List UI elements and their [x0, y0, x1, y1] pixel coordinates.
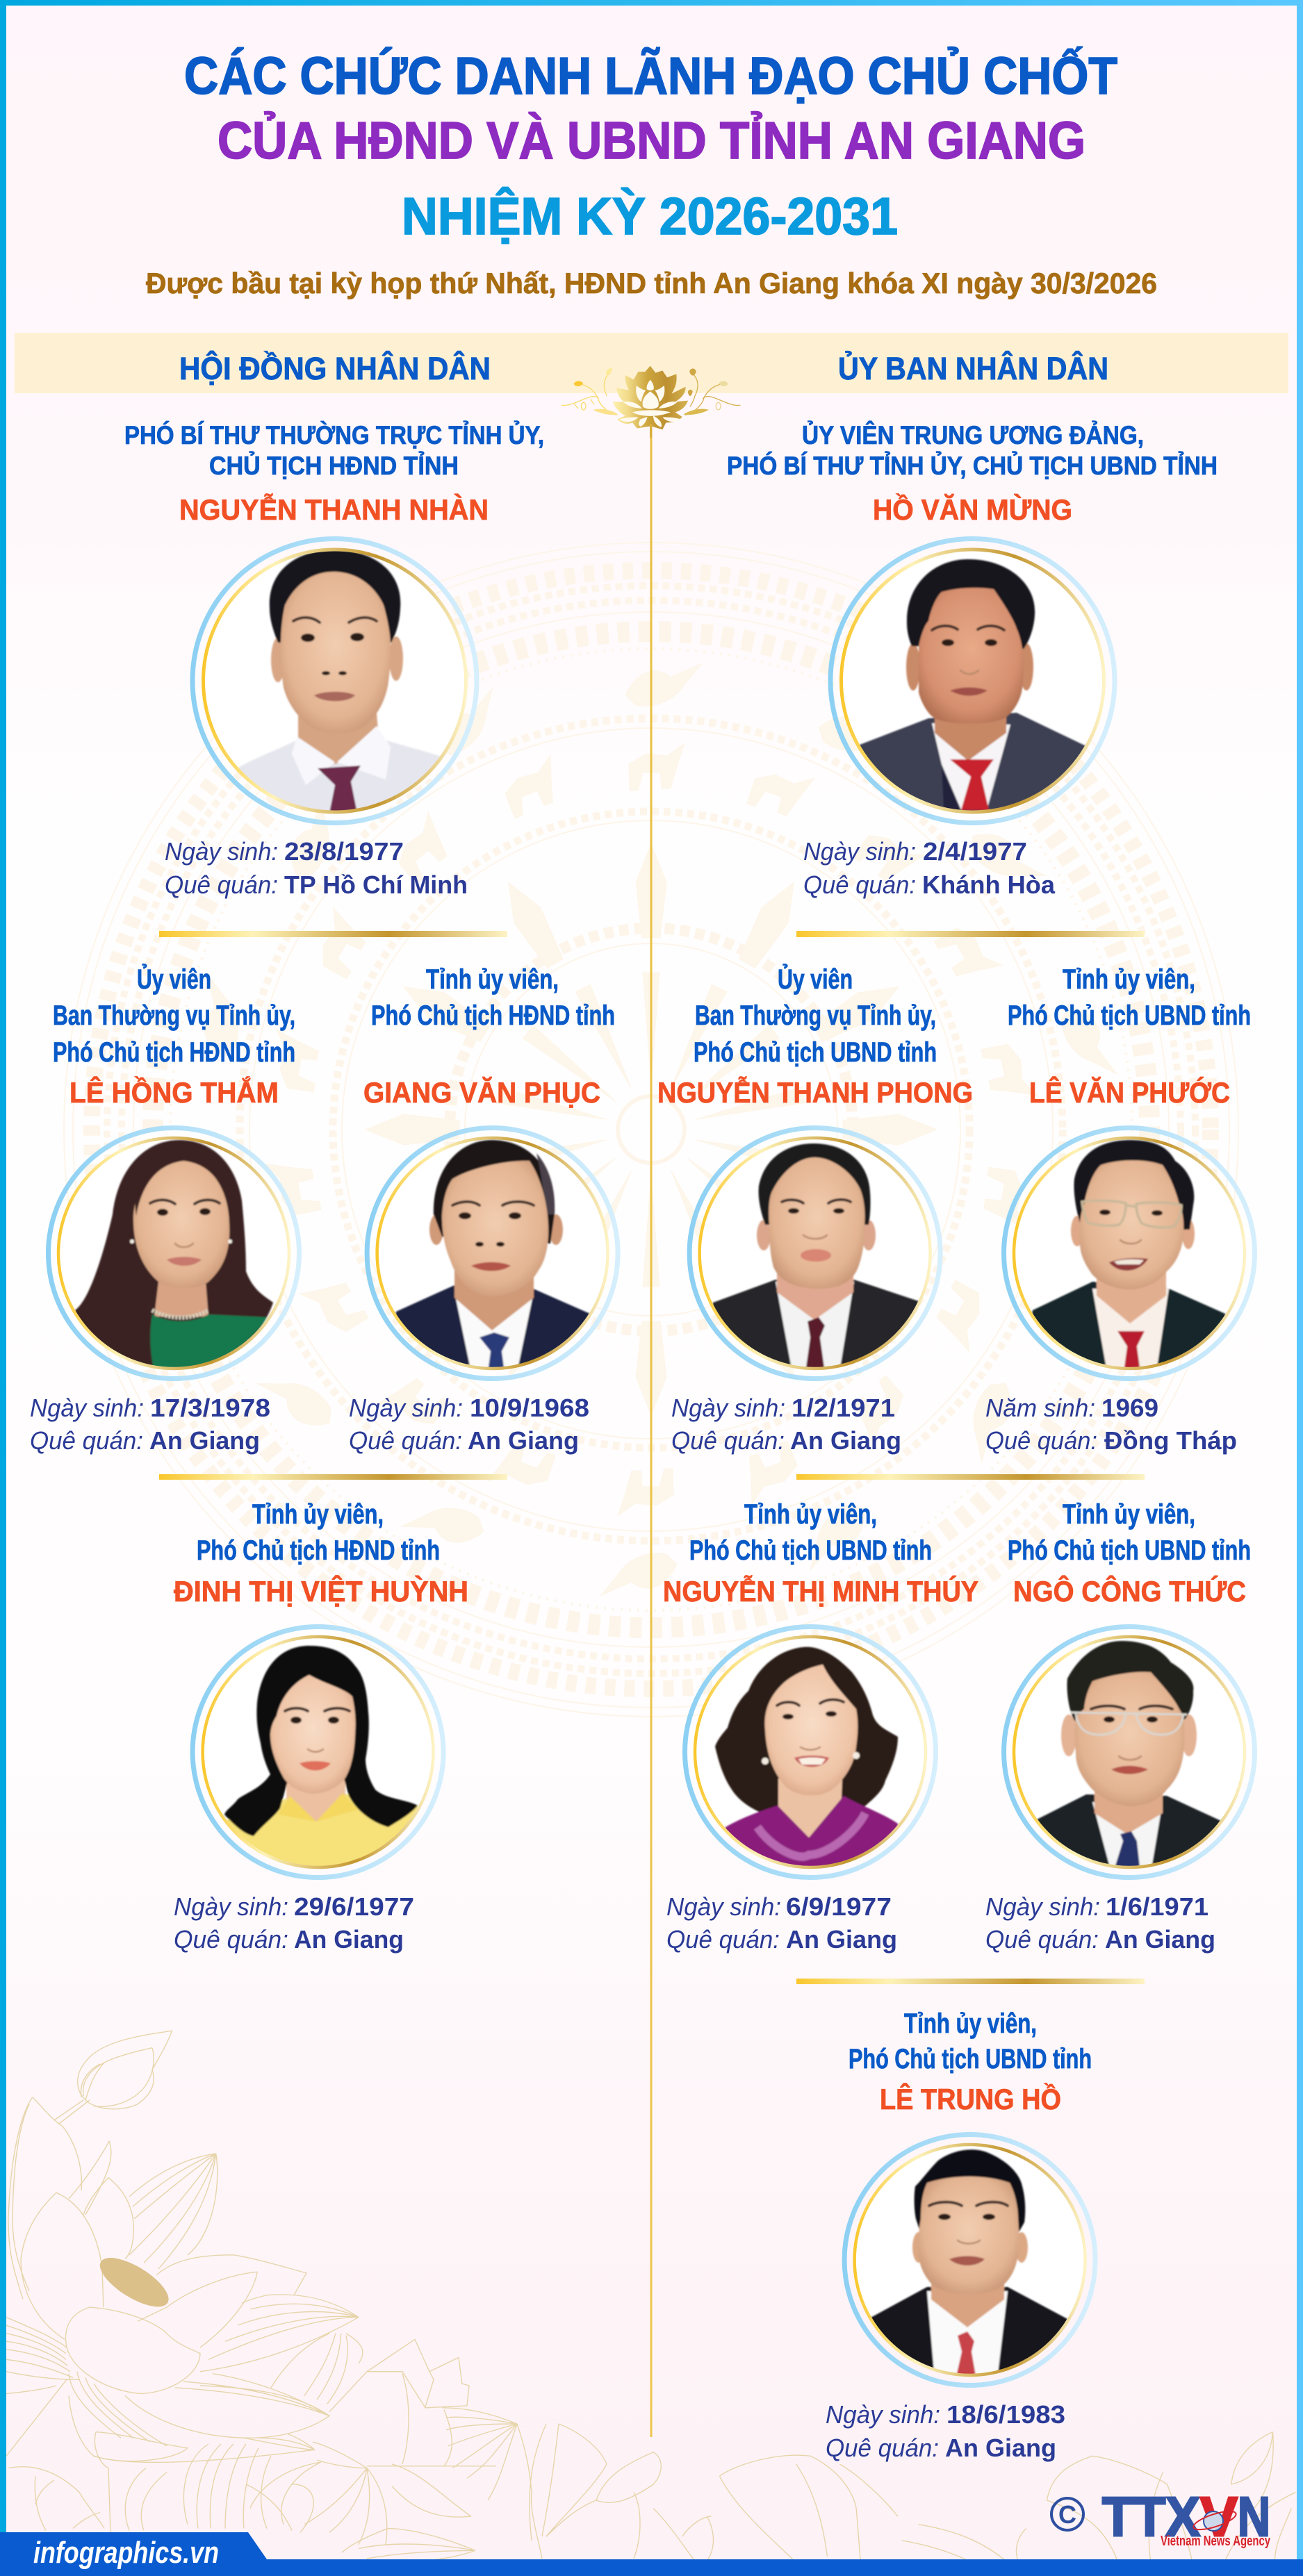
- role: Ủy viên: [778, 963, 853, 995]
- role: Phó Chủ tịch UBND tỉnh: [694, 1037, 937, 1068]
- panel: Lê Văn Phước: [985, 964, 1255, 1455]
- info: An Giang: [786, 1925, 897, 1954]
- role: Tỉnh ủy viên,: [1063, 964, 1195, 995]
- panel: Giang Văn Phục: [349, 964, 618, 1455]
- info: [666, 1892, 897, 1954]
- info: An Giang: [468, 1426, 579, 1455]
- info: 10/9/1968: [470, 1394, 589, 1422]
- role: [197, 1499, 440, 1566]
- portrait: [192, 539, 477, 823]
- background: lotus line art bottom right: [653, 2432, 1295, 2561]
- info: An Giang: [1105, 1925, 1215, 1954]
- role: PHÓ BÍ THƯ TỈNH ỦY, CHỦ TỊCH UBND TỈNH: [727, 451, 1218, 480]
- role: [53, 963, 295, 1068]
- info: [174, 1892, 414, 1954]
- name: HỒ VĂN MỪNG: [873, 493, 1072, 526]
- info: Ngày sinh:: [671, 1394, 785, 1422]
- name: LÊ HỒNG THẮM: [69, 1075, 279, 1109]
- info: 17/3/1978: [150, 1394, 270, 1422]
- panel: Nguyễn Thanh Phong: [657, 963, 973, 1455]
- info: Ngày sinh:: [165, 837, 278, 866]
- role: Ủy viên: [137, 963, 211, 995]
- role: [124, 420, 544, 480]
- title: CỦA HĐND VÀ UBND TỈNH AN GIANG: [218, 111, 1085, 170]
- role: Phó Chủ tịch HĐND tỉnh: [371, 1000, 615, 1031]
- role: Phó Chủ tịch UBND tỉnh: [849, 2044, 1092, 2074]
- role: [849, 2008, 1092, 2074]
- portrait: [1003, 1128, 1255, 1378]
- portrait: [830, 539, 1115, 823]
- info: 2/4/1977: [923, 837, 1027, 866]
- title: NHIỆM KỲ 2026-2031: [402, 187, 898, 245]
- header band: [15, 333, 1288, 393]
- name: NGUYỄN THANH PHONG: [657, 1075, 973, 1109]
- info: 18/6/1983: [946, 2400, 1065, 2429]
- role: Tỉnh ủy viên,: [1063, 1499, 1195, 1530]
- info: Quê quán:: [165, 870, 278, 899]
- info: Quê quán:: [30, 1426, 143, 1455]
- role: [689, 1499, 932, 1566]
- info: [803, 837, 1056, 899]
- info: 29/6/1977: [294, 1892, 414, 1921]
- title: [184, 47, 1117, 245]
- panel: Đinh Thị Việt Huỳnh: [174, 1499, 468, 1954]
- info: Khánh Hòa: [922, 870, 1056, 899]
- role: ỦY VIÊN TRUNG ƯƠNG ĐẢNG,: [802, 420, 1144, 449]
- name: LÊ VĂN PHƯỚC: [1029, 1075, 1230, 1109]
- info: Ngày sinh:: [349, 1394, 463, 1422]
- info: TP Hồ Chí Minh: [284, 870, 468, 899]
- info: 6/9/1977: [786, 1892, 892, 1921]
- name: NGUYỄN THỊ MINH THÚY: [663, 1574, 978, 1608]
- panel: Ngô Công Thức: [985, 1499, 1255, 1954]
- info: Quê quán:: [826, 2434, 939, 2462]
- portrait: [689, 1128, 940, 1378]
- name: NGÔ CÔNG THỨC: [1013, 1574, 1246, 1608]
- portrait: [685, 1627, 935, 1877]
- portrait: [367, 1128, 618, 1378]
- role: Tỉnh ủy viên,: [252, 1499, 384, 1530]
- name: LÊ TRUNG HỒ: [880, 2082, 1061, 2115]
- role: [727, 420, 1218, 480]
- icon: gold lotus: [562, 366, 740, 438]
- logo: TTXVN copyright: V: [1200, 2486, 1238, 2548]
- role: [1008, 964, 1251, 1031]
- panel: Lê Trung Hồ: [826, 2008, 1095, 2462]
- subtitle: Được bầu tại kỳ họp thứ Nhất, HĐND tỉnh An Giang khóa XI ngày 30/3/2026: [146, 267, 1157, 299]
- info: An Giang: [294, 1925, 404, 1954]
- info: [30, 1394, 270, 1455]
- info: Đồng Tháp: [1104, 1426, 1237, 1455]
- info: Quê quán:: [671, 1426, 785, 1455]
- role: [694, 963, 937, 1068]
- panel: Nguyễn Thanh Nhàn: [124, 420, 544, 899]
- info: Quê quán:: [174, 1925, 288, 1954]
- panel: Nguyễn Thị Minh Thúy: [663, 1499, 978, 1954]
- info: [985, 1892, 1215, 1954]
- bottom bar: [0, 2532, 1303, 2576]
- role: Ban Thường vụ Tỉnh ủy,: [695, 1000, 936, 1031]
- name: NGUYỄN THANH NHÀN: [179, 493, 489, 526]
- info: [165, 837, 468, 899]
- role: [371, 964, 615, 1031]
- info: Ngày sinh:: [30, 1394, 144, 1422]
- info: Quê quán:: [349, 1426, 462, 1455]
- info: Ngày sinh:: [803, 837, 916, 866]
- info: Ngày sinh:: [826, 2400, 940, 2429]
- role: Phó Chủ tịch UBND tỉnh: [689, 1535, 932, 1566]
- portrait: [49, 1128, 299, 1378]
- info: Quê quán:: [803, 870, 916, 899]
- role: PHÓ BÍ THƯ THƯỜNG TRỰC TỈNH ỦY,: [124, 420, 544, 449]
- center divider line: [650, 424, 652, 2437]
- info: An Giang: [945, 2434, 1056, 2462]
- source: infographics.vn: infographics.vn: [33, 2536, 219, 2570]
- info: Năm sinh:: [985, 1394, 1095, 1422]
- info: An Giang: [790, 1426, 901, 1455]
- info: An Giang: [149, 1426, 260, 1455]
- info: Quê quán:: [985, 1426, 1097, 1455]
- role: Tỉnh ủy viên,: [426, 964, 559, 995]
- info: 1/2/1971: [792, 1394, 895, 1422]
- info: 1969: [1101, 1394, 1158, 1422]
- heading: Hội đồng nhân dân: HỘI ĐỒNG NHÂN DÂN: [179, 351, 491, 386]
- info: Quê quán:: [985, 1925, 1099, 1954]
- panel: Hồ Văn Mừng: [727, 420, 1218, 899]
- info: 1/6/1971: [1106, 1892, 1208, 1921]
- portrait: [192, 1627, 443, 1877]
- info: 23/8/1977: [284, 837, 404, 866]
- logo: TTXVN copyright: N: [1238, 2486, 1270, 2548]
- role: Tỉnh ủy viên,: [904, 2008, 1037, 2039]
- title: CÁC CHỨC DANH LÃNH ĐẠO CHỦ CHỐT: [184, 47, 1117, 105]
- logo: TTXVN copyright: TTX: [1102, 2486, 1200, 2548]
- heading: Ủy ban nhân dân: ỦY BAN NHÂN DÂN: [838, 351, 1108, 386]
- role: Tỉnh ủy viên,: [744, 1499, 877, 1530]
- role: Phó Chủ tịch HĐND tỉnh: [197, 1535, 440, 1566]
- portrait: [1003, 1627, 1255, 1877]
- info: Ngày sinh:: [174, 1892, 288, 1921]
- background: lotus line art bottom left: [6, 2031, 654, 2560]
- info: Ngày sinh:: [666, 1892, 781, 1921]
- info: Ngày sinh:: [985, 1892, 1100, 1921]
- info: [671, 1394, 901, 1455]
- role: [1008, 1499, 1251, 1566]
- info: [349, 1394, 589, 1455]
- portrait: [844, 2134, 1095, 2386]
- role: Phó Chủ tịch HĐND tỉnh: [53, 1037, 295, 1068]
- panel: Lê Hồng Thắm: [30, 963, 299, 1455]
- logo: TTXVN copyright: [1051, 2486, 1271, 2549]
- logo: TTXVN copyright: C: [1058, 2500, 1076, 2529]
- background: bronze drum seal: [64, 543, 1238, 1717]
- info: Quê quán:: [666, 1925, 780, 1954]
- role: Ban Thường vụ Tỉnh ủy,: [53, 1000, 295, 1031]
- role: CHỦ TỊCH HĐND TỈNH: [209, 451, 459, 480]
- info: [826, 2400, 1065, 2462]
- info: [985, 1394, 1237, 1455]
- name: ĐINH THỊ VIỆT HUỲNH: [174, 1574, 468, 1608]
- name: GIANG VĂN PHỤC: [363, 1076, 600, 1109]
